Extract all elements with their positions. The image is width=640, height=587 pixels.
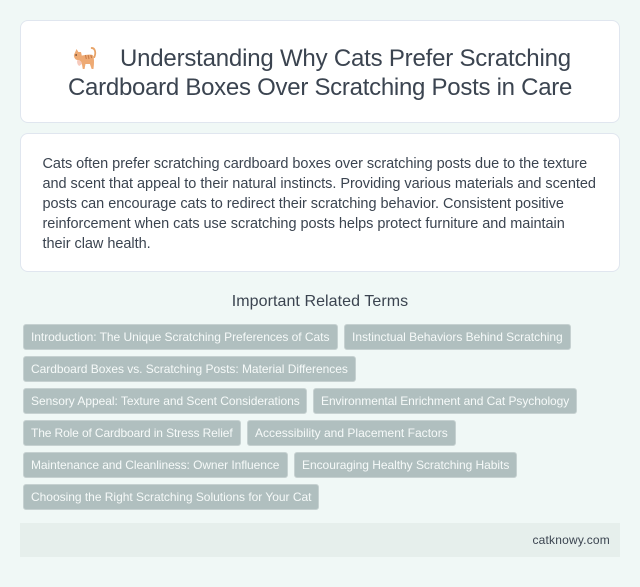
icon: orange cat xyxy=(74,47,96,69)
tag xyxy=(23,484,319,510)
tag: Accessibility and Placement Factors xyxy=(255,426,448,440)
panel: title card xyxy=(20,20,620,123)
heading: important related terms: Important Related Terms xyxy=(232,293,408,310)
description text xyxy=(42,156,596,252)
tag xyxy=(247,420,456,446)
tag xyxy=(23,452,288,478)
panel: description card: and scent that appeal to their natural instincts. Providing various materials and scented xyxy=(42,176,596,192)
tag: Maintenance and Cleanliness: Owner Influence xyxy=(31,458,279,472)
tag xyxy=(23,324,338,350)
tag: Choosing the Right Scratching Solutions for Your Cat xyxy=(31,490,311,504)
footer source text: catknowy.com xyxy=(532,533,610,547)
tag xyxy=(294,452,517,478)
panel: description card: posts can encourage cats to redirect their scratching behavior. Consistent positive xyxy=(42,196,564,212)
title line 2: Cardboard Boxes Over Scratching Posts in Care xyxy=(68,74,572,101)
tag: Sensory Appeal: Texture and Scent Considerations xyxy=(31,394,300,408)
tag xyxy=(23,388,307,414)
tag: The Role of Cardboard in Stress Relief xyxy=(31,426,233,440)
tag xyxy=(23,356,356,382)
tag: Instinctual Behaviors Behind Scratching xyxy=(352,330,563,344)
panel: description card: reinforcement when cats use scratching posts helps protect furniture and maintain xyxy=(42,216,565,232)
tag: Encouraging Healthy Scratching Habits xyxy=(302,458,509,472)
tag xyxy=(23,420,241,446)
tag: Environmental Enrichment and Cat Psychology xyxy=(321,394,569,408)
panel: description card: Cats often prefer scratching cardboard boxes over scratching posts due to the texture xyxy=(42,156,587,172)
footer bar xyxy=(20,523,620,557)
tag xyxy=(344,324,571,350)
tag: Introduction: The Unique Scratching Preferences of Cats xyxy=(31,330,329,344)
panel: description card: their claw health. xyxy=(42,236,151,252)
tag list xyxy=(23,324,577,510)
panel: description card xyxy=(20,133,620,272)
tag xyxy=(313,388,577,414)
title line 1: Understanding Why Cats Prefer Scratching xyxy=(120,45,571,72)
tag: Cardboard Boxes vs. Scratching Posts: Material Differences xyxy=(31,362,348,376)
